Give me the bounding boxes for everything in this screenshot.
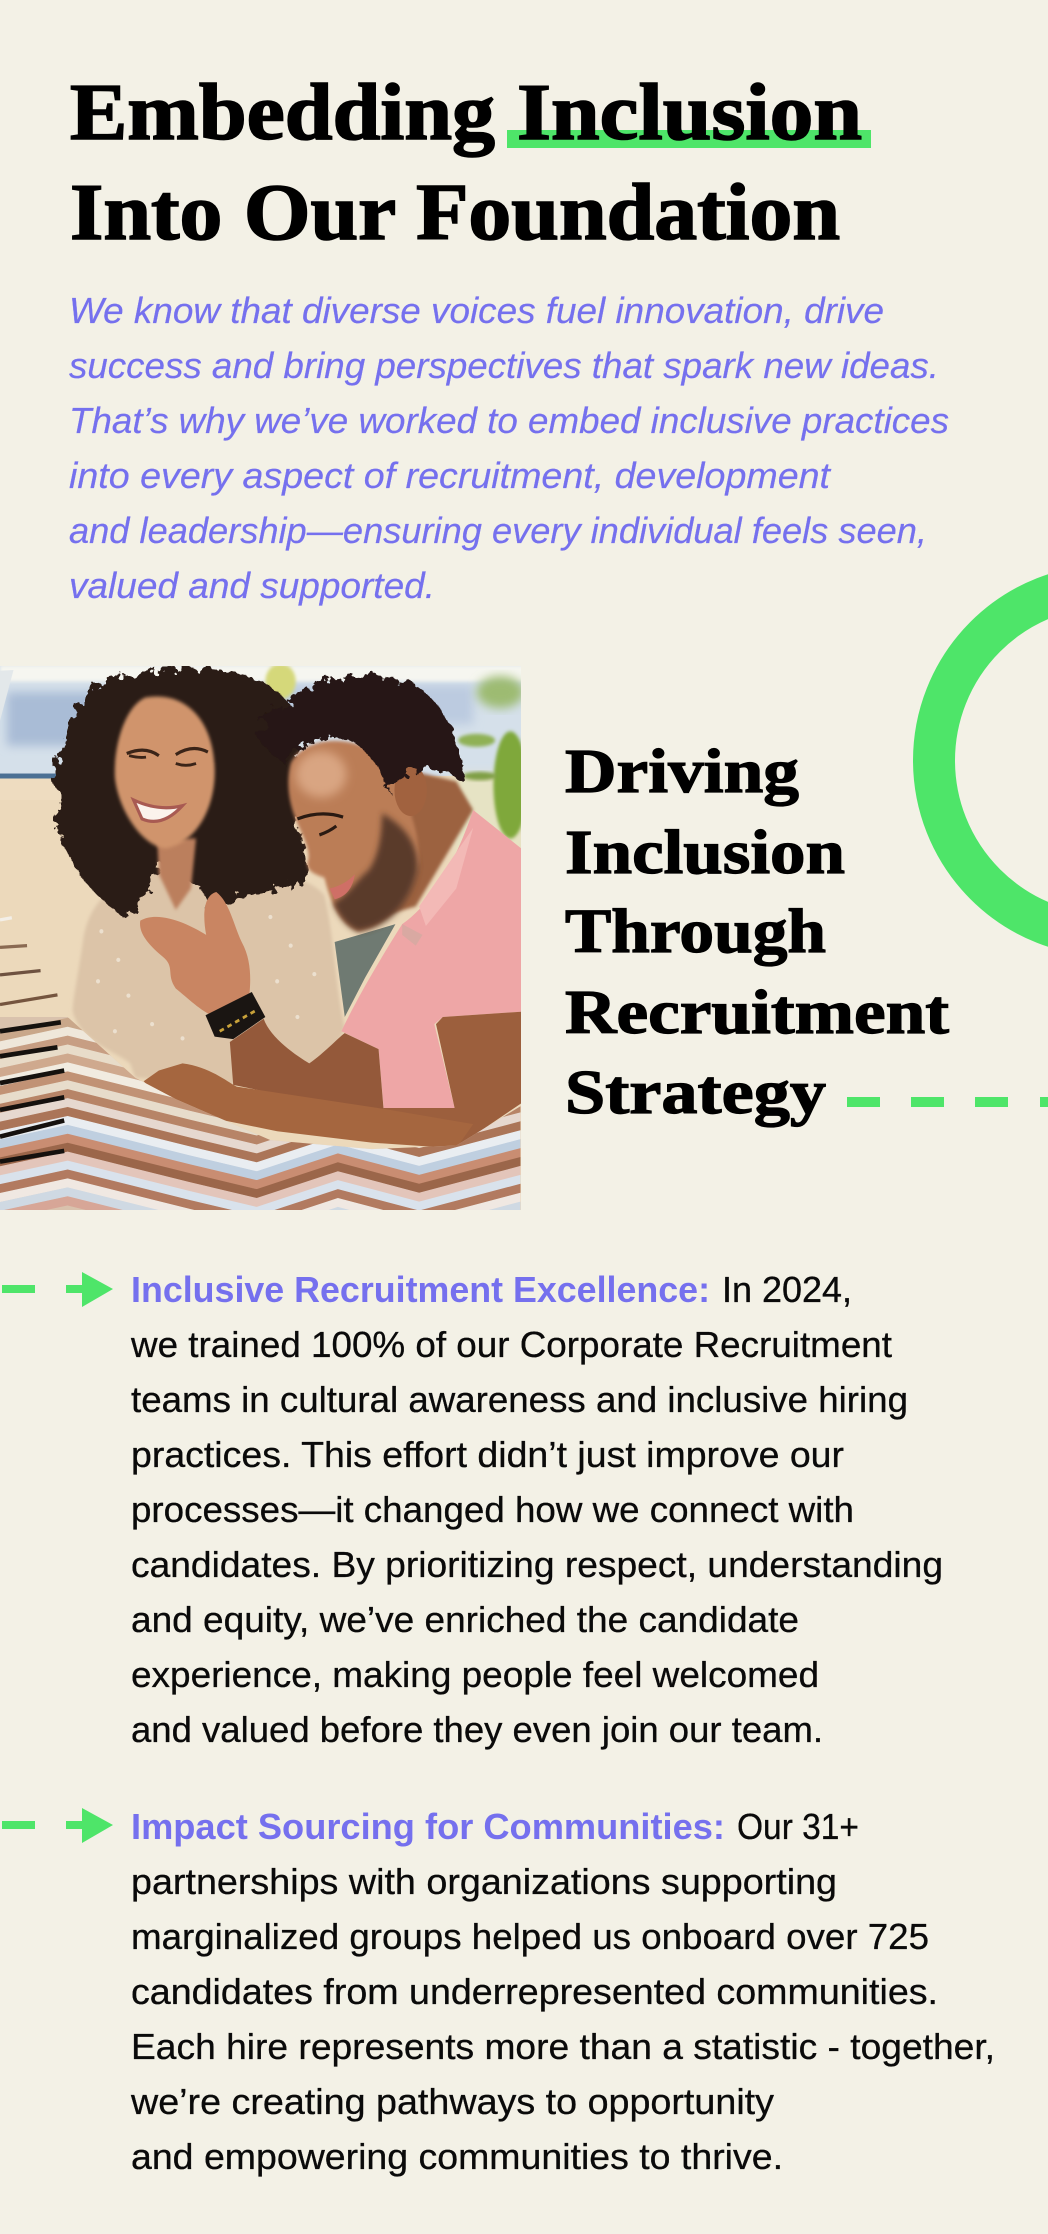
dashed green line bbox=[847, 1097, 1048, 1107]
distorted table bbox=[0, 1017, 520, 1210]
intro paragraph: success and bring perspectives that spark new ideas. bbox=[69, 345, 939, 386]
resting forearm and hand bbox=[144, 1063, 473, 1148]
lead-in: Inclusive Recruitment Excellence: bbox=[131, 1269, 710, 1310]
woman neck and face bbox=[157, 838, 196, 910]
text block: impact sourcing for communities: Our 31+ bbox=[737, 1806, 859, 1847]
woman blouse bbox=[73, 871, 345, 1085]
text block: inclusive recruitment excellence: candidates. By prioritizing respect, understanding bbox=[131, 1544, 943, 1585]
text block: inclusive recruitment excellence: processes—it changed how we connect with bbox=[131, 1489, 854, 1530]
text block: inclusive recruitment excellence bbox=[130, 1269, 943, 1750]
section heading: Inclusion bbox=[565, 819, 845, 887]
text block: inclusive recruitment excellence: teams in cultural awareness and inclusive hiring bbox=[131, 1379, 908, 1420]
woman features bbox=[127, 749, 208, 756]
intro paragraph bbox=[69, 290, 949, 606]
arrow: second bullet bbox=[2, 1808, 113, 1843]
intro paragraph: That’s why we’ve worked to embed inclusive practices bbox=[69, 400, 949, 441]
lead-in: Impact Sourcing for Communities: bbox=[131, 1806, 725, 1847]
section heading: Driving bbox=[565, 738, 799, 806]
text block: inclusive recruitment excellence: and valued before they even join our team. bbox=[131, 1709, 823, 1750]
right upper arm bbox=[379, 1012, 522, 1147]
text block: impact sourcing for communities bbox=[130, 1806, 995, 2177]
text block: inclusive recruitment excellence: we trained 100% of our Corporate Recruitment bbox=[130, 1324, 892, 1365]
man hair bbox=[258, 676, 463, 792]
text block: inclusive recruitment excellence: In 2024, bbox=[722, 1269, 852, 1310]
decorative green ring bbox=[934, 586, 1048, 936]
text block: impact sourcing for communities: candidates from underrepresented communities. bbox=[131, 1971, 938, 2012]
text block: inclusive recruitment excellence: experience, making people feel welcomed bbox=[131, 1654, 819, 1695]
section heading bbox=[565, 738, 949, 1127]
intro paragraph: into every aspect of recruitment, development bbox=[69, 455, 832, 496]
man face bbox=[288, 741, 419, 931]
grey chair behind bbox=[335, 924, 395, 1017]
wristband bbox=[206, 992, 265, 1039]
intro paragraph: We know that diverse voices fuel innovation, drive bbox=[69, 290, 884, 331]
text block: impact sourcing for communities: and empowering communities to thrive. bbox=[131, 2136, 783, 2177]
title line 1: Embedding bbox=[70, 69, 495, 157]
text block: impact sourcing for communities: partnerships with organizations supporting bbox=[131, 1861, 837, 1902]
title bbox=[70, 69, 871, 257]
title line 2: Into Our Foundation bbox=[70, 169, 840, 257]
title highlight bbox=[507, 130, 871, 148]
section heading: Through bbox=[565, 898, 826, 966]
man neck bbox=[392, 770, 475, 914]
section heading: Strategy bbox=[565, 1059, 826, 1127]
man ear bbox=[394, 767, 424, 816]
arrow: first bullet bbox=[2, 1272, 113, 1307]
text block: impact sourcing for communities: Each hire represents more than a statistic - together, bbox=[131, 2026, 995, 2067]
text block: inclusive recruitment excellence: practices. This effort didn’t just improve our bbox=[131, 1434, 844, 1475]
text block: inclusive recruitment excellence: and equity, we’ve enriched the candidate bbox=[131, 1599, 799, 1640]
intro paragraph: and leadership—ensuring every individual feels seen, bbox=[69, 510, 927, 551]
left edge distortion bbox=[0, 670, 57, 1005]
woman hair bbox=[53, 668, 305, 917]
title line 1: Inclusion bbox=[517, 69, 862, 157]
man beard bbox=[333, 814, 418, 931]
photo: two colleagues smiling at a table bbox=[0, 664, 527, 1247]
raised hand bbox=[140, 892, 250, 1019]
text block: impact sourcing for communities: marginalized groups helped us onboard over 725 bbox=[131, 1916, 929, 1957]
section heading: Recruitment bbox=[565, 979, 949, 1047]
intro paragraph: valued and supported. bbox=[69, 565, 435, 606]
man polo shirt bbox=[341, 810, 522, 1108]
text block: impact sourcing for communities: we’re creating pathways to opportunity bbox=[130, 2081, 774, 2122]
raised forearm and upper arm bbox=[230, 1019, 384, 1110]
